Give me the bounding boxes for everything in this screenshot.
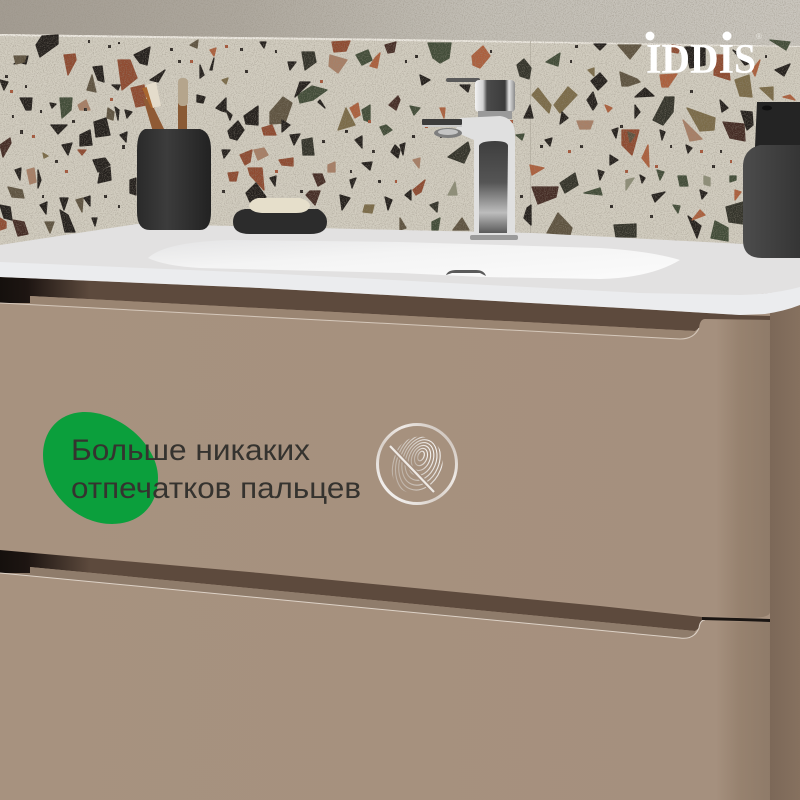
icon: crossed-out fingerprint	[378, 420, 460, 508]
toothbrush: right	[178, 78, 188, 133]
logo: IDDIS	[646, 37, 756, 83]
terrazzo backsplash	[0, 34, 800, 270]
drawer gap line	[702, 617, 770, 622]
drain	[446, 270, 486, 276]
heading text: Больше никаких	[71, 434, 310, 467]
logo: ®	[756, 32, 762, 41]
cabinet side	[770, 300, 800, 800]
countertop	[0, 224, 800, 315]
green blob	[43, 412, 158, 524]
specks	[5, 40, 767, 242]
lower drawer front	[0, 573, 770, 800]
heading text: отпечатков пальцев	[71, 472, 361, 505]
left chips	[0, 35, 165, 236]
heading text	[71, 434, 361, 505]
fingerprint ridges	[392, 436, 443, 492]
soap dish	[233, 198, 327, 234]
plaster wall	[0, 0, 800, 60]
sink basin	[148, 240, 680, 279]
soap	[249, 198, 310, 213]
middle chips	[190, 40, 400, 213]
dispenser	[743, 102, 800, 258]
lower handle groove	[0, 550, 705, 638]
wall grain texture	[0, 0, 800, 250]
counter front lip	[0, 262, 800, 315]
cup	[137, 129, 211, 230]
faucet	[422, 78, 518, 240]
upper drawer shadow band	[0, 277, 770, 339]
toothbrush: left	[142, 82, 165, 132]
right chips	[400, 40, 795, 241]
upper drawer front	[0, 303, 770, 618]
upper handle groove	[0, 296, 695, 339]
